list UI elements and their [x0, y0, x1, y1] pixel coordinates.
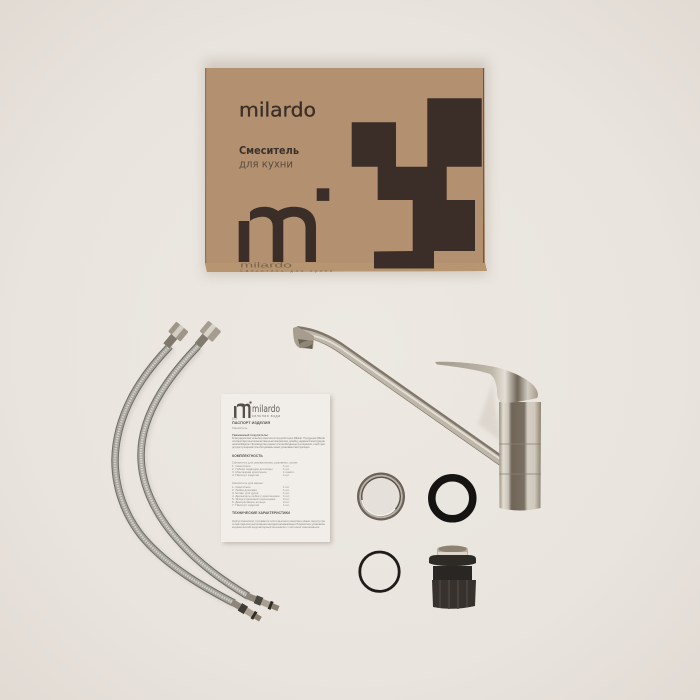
- chrome mounting ring: [357, 472, 405, 520]
- booklet text: 1 шт.: [283, 485, 290, 489]
- booklet text: Корпус смесителя, торговая из литого высокого качества и имеет защиту при: [232, 519, 325, 523]
- booklet tagline: сильная вода: [252, 414, 280, 418]
- booklet text: 1 шт.: [283, 464, 290, 468]
- booklet text: 1 шт.: [283, 473, 290, 477]
- instruction booklet: [221, 394, 332, 544]
- booklet text: 1 шт.: [283, 491, 290, 495]
- booklet text: Смеситель: [232, 426, 248, 430]
- right hose: [141, 320, 280, 613]
- booklet text: 4. Паспорт изделия: [232, 473, 259, 477]
- booklet text: слоев покрытия, выполненное методом гальванизации. В смесителе установлен: [232, 522, 325, 526]
- flap print: Смеситель для кухни: [240, 269, 332, 273]
- flap print: milardo: [240, 262, 292, 270]
- black o-ring: [360, 552, 399, 591]
- pixel pattern: [352, 98, 482, 268]
- booklet text: Смеситель для умывальника, раковины, кухни:: [232, 460, 298, 464]
- booklet text: 2. Лейка душевая: [232, 488, 257, 492]
- spout aerator: [293, 326, 314, 349]
- cardboard product box: [204, 60, 488, 276]
- kitchen faucet: [293, 326, 541, 510]
- right hose top nut: [192, 320, 221, 351]
- booklet text: 2. Гибкая подводка для воды: [232, 467, 272, 471]
- booklet text: 1 шт.: [283, 494, 290, 498]
- booklet text: Смеситель для ванны:: [232, 481, 264, 485]
- booklet brand: milardo: [252, 404, 280, 415]
- logo dot: [317, 188, 329, 201]
- booklet text: 4. Держатель лейки с креплением: [232, 494, 279, 498]
- booklet text: 2 шт.: [283, 500, 290, 504]
- booklet text: 5. Эксцентриковый переходник: [232, 497, 276, 501]
- left hose bottom fitting: [230, 599, 263, 623]
- black rubber gasket: [432, 478, 473, 519]
- faucet body: [499, 402, 541, 510]
- booklet m logo: [234, 403, 250, 418]
- booklet text: соответствует высококачественным материалам, дизайну, надёжной конструкции: [232, 439, 325, 443]
- booklet logo dot: [250, 402, 252, 404]
- booklet text: 1. Смеситель: [232, 464, 251, 468]
- booklet text: КОМПЛЕКТНОСТЬ: [232, 454, 263, 458]
- left hose top nut: [160, 321, 189, 351]
- booklet text: 1 шт.: [283, 467, 290, 471]
- booklet text: на всей Европе. Производство, ремонт или необходимую при гарантии, и эксплуат: [232, 442, 326, 446]
- booklet text: ТЕХНИЧЕСКИЕ ХАРАКТЕРИСТИКИ: [232, 511, 291, 515]
- booklet text: 1 шт.: [283, 488, 290, 492]
- booklet text: 7. Паспорт изделия: [232, 503, 259, 507]
- brand wordmark: milardo: [239, 99, 316, 122]
- booklet text: ПАСПОРТ ИЗДЕЛИЯ: [232, 421, 270, 425]
- product title: Смеситель: [239, 144, 299, 157]
- faucet spout: [297, 331, 503, 463]
- booklet text: 6. Декоративное кольцо: [232, 500, 266, 504]
- flap print: [240, 262, 332, 273]
- left hose: [115, 321, 263, 623]
- booklet text: 1 компл.: [283, 470, 295, 474]
- booklet text: 1 шт.: [283, 503, 290, 507]
- right hose bottom fitting: [244, 592, 280, 613]
- booklet text: 3. Монтажная крепление: [232, 470, 267, 474]
- booklet text: 3. Шланг для душа: [232, 491, 259, 495]
- booklet text: Уважаемый покупатель!: [232, 433, 268, 437]
- braided hoses: [115, 320, 280, 623]
- booklet text: для доступа время сток обслуживать может установка и эксплуатации.: [232, 445, 310, 449]
- faucet shadow: [478, 378, 501, 441]
- booklet text: ЕСЕ: [232, 416, 238, 420]
- hose shadow: [117, 348, 250, 605]
- booklet text: керамический водозапорный механизм с системой смешивания.: [232, 525, 320, 529]
- booklet text: Благодарим вас за выбор смесителя под мой серии Milardo. Продукция Milardo: [232, 436, 325, 440]
- booklet text: [232, 416, 326, 529]
- black plastic drain fitting: [429, 546, 476, 609]
- booklet text: 1. Смеситель: [232, 485, 251, 489]
- product subtitle: для кухни: [239, 158, 293, 171]
- faucet handle: [435, 362, 538, 403]
- large m logo: [239, 207, 316, 262]
- box front flap: [205, 263, 487, 272]
- booklet text: 2 шт.: [283, 497, 290, 501]
